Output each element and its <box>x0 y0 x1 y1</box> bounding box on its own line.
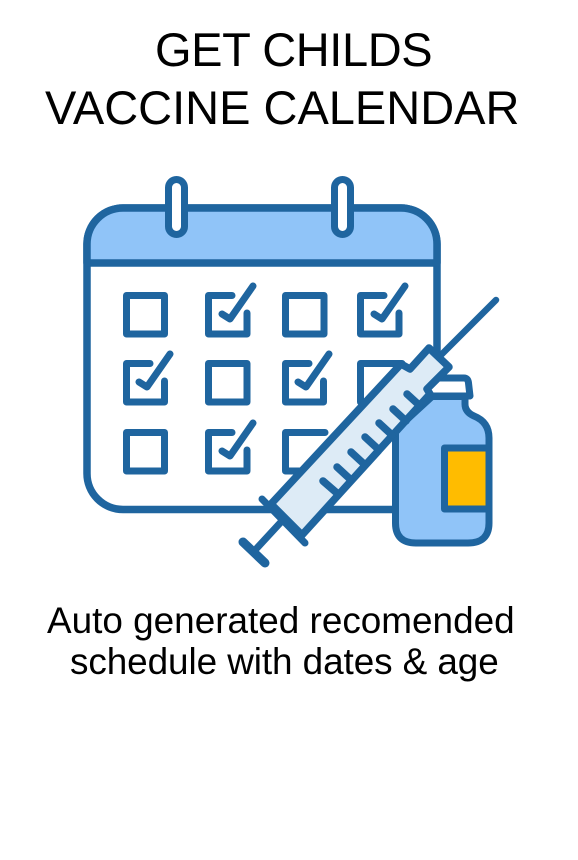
needle <box>441 300 496 355</box>
caption: Auto generated recomended <box>47 600 515 641</box>
plunger handle <box>243 542 265 563</box>
graduation ticks <box>323 394 419 494</box>
barrel <box>271 348 449 535</box>
syringe <box>243 300 496 563</box>
flange <box>262 499 305 543</box>
caption: schedule with dates & age <box>70 641 499 682</box>
caption <box>47 600 515 682</box>
calendar header <box>87 208 437 263</box>
plunger <box>257 522 281 548</box>
vial label <box>444 448 489 509</box>
vaccine vial <box>396 378 489 543</box>
calendar ring left <box>168 180 184 234</box>
calendar ring right <box>334 180 350 234</box>
title <box>45 23 519 134</box>
vial fill <box>396 396 489 543</box>
title: GET CHILDS <box>155 23 432 76</box>
checkbox grid <box>126 286 405 471</box>
calendar body <box>87 208 437 510</box>
calendar <box>87 180 437 510</box>
vial outline <box>396 396 489 543</box>
vial cap <box>420 378 470 396</box>
title: VACCINE CALENDAR <box>45 81 519 134</box>
